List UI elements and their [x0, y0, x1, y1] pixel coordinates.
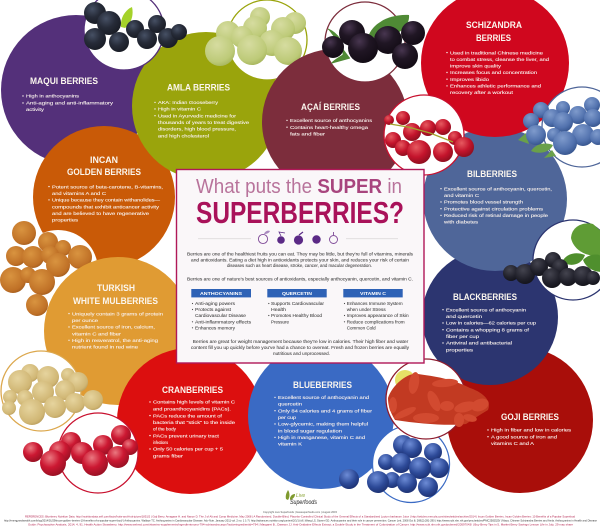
text block: blueberry benefits — [274, 395, 372, 448]
text block: amla benefits: disorders, high blood pressure, — [158, 127, 236, 133]
icon: cranberries photo — [23, 413, 138, 493]
text block: intro: diseases such as heart disease, stroke, cancer, and macular degeneration. — [227, 263, 372, 268]
text block: cranberry benefits: of the body — [153, 427, 177, 433]
column: quercetin: QUERCETIN — [282, 291, 313, 296]
text block: incan benefits — [48, 184, 163, 224]
column: vitamin c: Improves appearance of Skin — [347, 313, 409, 318]
panel: goji berries — [447, 347, 593, 493]
text block: bilberry benefits — [440, 186, 552, 226]
icon: incan golden berries photo — [0, 221, 98, 316]
panel: schizandra berries — [421, 0, 569, 137]
text block: schizandra benefits: improve skin quality — [450, 64, 502, 70]
column: anthocyanins: Protects against — [195, 307, 232, 312]
text block: closing: content fill you up quickly before you've had a chance to overeat. Fresh and frozen berries are equally — [191, 345, 410, 350]
heading: turkish white mulberries — [73, 283, 158, 306]
icon: white mulberries photo — [1, 351, 103, 431]
heading: incan golden berries: INCAN — [90, 155, 118, 165]
text block: copyright and sources: http://energyandwealth.com/blog/2014/01/29/incan-golden-berries-10-benefits-of-a-popular-super-food/ | Anthocyanins. Wallace TC. Anthocyanins in Cardiovascular Disease. Adv Nutr. January 2011 vol. 2 no. 1 1-7 | http://advances.nutrition.org/content/2/1/1.full | Wang LS, Stoner GD. Anthocyanins and their role in cancer prevention. Cancer Lett. 2008 Oct 8; 269(2):281-290 | http://www.ncbi.nlm.nih.gov/pmc/articles/PMC2582525/ | Maca, Chinese Schizandra Berries and Amla. Anthocyanins in Health and Disease — [4, 520, 598, 522]
column: anthocyanins: Enhances memory — [195, 325, 236, 330]
text block: cranberry benefits: grams fiber — [153, 453, 183, 459]
text block: blueberry benefits: Excellent source of anthocyanin and — [278, 395, 369, 401]
text block: cranberry benefits: and proanthocyanidins (PACs). — [153, 406, 231, 412]
heading: turkish white mulberries: TURKISH — [97, 283, 135, 293]
text block: goji benefits: vitamins C and A — [491, 441, 535, 447]
text block: copyright and sources: REFERENCES: Blueberry Nutrition Data. http://nutritiondata.self.com/facts/fruits-and-fruit-juices/1851/2 | Goji Berry. Amagase H. and Nance D. The J of Alt and Comp Medicine. May 2008 | A Randomized, Double-Blind, Placebo-Controlled Clinical Study of the General Effects of a Standardized Lycium barbarum Juice | http://articles.mercola.com/sites/articles/archive/2014 | Incan Golden Berries, Incan Golden Berries: 10 Benefits of a Popular Superfood — [25, 516, 576, 518]
text block: incan benefits: and are believed to have regenerative — [52, 211, 149, 217]
text block: mulberry benefits — [68, 311, 163, 351]
text block: blackberry benefits: Excellent source of anthocyanin — [446, 307, 526, 313]
text block: schizandra benefits — [446, 50, 549, 96]
text block: blueberry benefits: per cup — [278, 415, 296, 421]
text block: schizandra benefits: Used in traditional Chinese medicine — [450, 50, 543, 56]
text block: cranberry benefits: PACs prevent urinary tract — [153, 433, 220, 439]
text block: cranberry benefits: bacteria that "stick" to the inside — [153, 420, 235, 426]
icon: acai photo — [322, 2, 425, 82]
text block: blackberry benefits: Low in calories—62 calories per cup — [446, 321, 536, 327]
text block: mulberry benefits: per ounce — [72, 318, 98, 324]
text block: cranberry benefits: Contains high levels of vitamin C — [153, 400, 236, 406]
column: anthocyanins: Cardiovascular Disease — [195, 313, 246, 318]
column: vitamin c: VITAMIN C — [360, 291, 387, 296]
heading: acai berries: AÇAÍ BERRIES — [301, 101, 360, 112]
icon: goji berries photo — [386, 359, 491, 439]
text block: incan benefits: properties — [52, 218, 79, 224]
text block: bilberry benefits: and vitamin C — [444, 193, 480, 199]
text block: amla benefits: Used in Ayurvedic medicine for — [158, 113, 236, 119]
text block: maqui benefits — [22, 94, 114, 113]
logo: live superfoods — [286, 490, 318, 506]
text block: intro — [187, 251, 414, 282]
heading: blueberries: BLUEBERRIES — [293, 380, 352, 390]
text block: blackberry benefits: Antiviral and antibacterial — [446, 341, 512, 347]
text block: closing — [191, 339, 410, 356]
heading: blackberries: BLACKBERRIES — [453, 292, 517, 302]
panel: bilberries — [423, 127, 567, 271]
text block: goji benefits — [487, 428, 572, 447]
panel: blueberries — [248, 343, 394, 489]
text block: intro: Berries are one of the healthiest fruits you can eat. They may be little, but they're full of vitamins, minerals — [187, 251, 414, 256]
panel: blackberries — [422, 249, 558, 385]
text block: bilberry benefits: with diabetes — [444, 220, 479, 226]
text block: bilberry benefits: Protective against circulation problems — [444, 206, 544, 212]
text block: schizandra benefits: recovery after a workout — [450, 90, 514, 96]
text block: blackberry benefits: properties — [446, 347, 474, 353]
column: quercetin: Pressure — [271, 319, 289, 324]
text block: amla benefits: AKA: Indian Gooseberry — [158, 100, 219, 106]
text block: mulberry benefits: vitamin C and fiber — [72, 331, 121, 337]
text block: goji benefits: A good source of iron and — [491, 434, 557, 440]
column: quercetin: Supports Cardiovascular — [271, 301, 324, 306]
text block: incan benefits: compounds that exhibit anticancer activity — [52, 204, 160, 210]
text block: acai benefits: Contains heart-healthy omega — [290, 125, 368, 131]
heading: schizandra berries: SCHIZANDRA — [466, 20, 522, 30]
title: SUPERBERRIES? — [196, 196, 404, 230]
icon: amla photo — [205, 0, 307, 80]
text block: incan benefits: and vitamins A and C — [52, 191, 107, 197]
text block: copyright and sources: Guide: Psychoactive Analysis, 2014, 4, 91. Health Action Strawberry. http://www.webmd.com/vitamins-supplements/ingredientmono-794-schisandra.aspx?activeingredientid=794 | Margaret B., Dawson JJ. Anti-Oxidative Effects Extract; a Double-Study in the Treatment of Colonization of Cancer. http://www.ncbi.nlm.nih.gov/pubmed/20597043/ | Buy Berry Tips in 5, Market Berry Savings Lesson Life in July, 29 may share — [28, 524, 574, 526]
text block: copyright and sources — [4, 510, 598, 526]
column: anthocyanins — [191, 289, 252, 330]
text block: closing: Berries are great for weight management because they're low in calories. Their high fiber and water — [193, 339, 409, 344]
column: quercetin: Health — [271, 307, 286, 312]
column: vitamin c: Enhances Immune System — [347, 301, 403, 306]
heading: bilberries: BILBERRIES — [467, 169, 517, 179]
heading: maqui berries: MAQUI BERRIES — [30, 76, 98, 86]
column: vitamin c: when under Stress — [347, 307, 386, 312]
panel: turkish white mulberries — [44, 257, 192, 405]
title — [196, 176, 404, 230]
column: quercetin — [267, 289, 327, 324]
panel: incan golden berries — [33, 126, 175, 268]
text block: maqui benefits: High in anthocyanins — [26, 94, 80, 100]
text block: bilberry benefits: Excellent source of anthocyanin, quercetin, — [444, 186, 552, 192]
text block: mulberry benefits: Excellent source of iron, calcium, — [72, 325, 155, 331]
text block: blueberry benefits: quercetin — [278, 402, 302, 408]
text block: cranberry benefits — [149, 400, 236, 459]
text block: mulberry benefits: High in resveratrol, the anti-aging — [72, 338, 158, 344]
panel: amla berries — [132, 32, 280, 180]
text block: intro: and antioxidants. Eating a diet high in antioxidants protects your skin, and reduces your risk of certain — [191, 257, 409, 262]
text block: cranberry benefits: infections — [153, 440, 168, 446]
text block: schizandra benefits: Enhances athletic performance and — [450, 84, 541, 90]
text block: blackberry benefits: and quercetin — [446, 314, 482, 320]
heading: amla berries: AMLA BERRIES — [167, 82, 230, 92]
text block: blueberry benefits: High in manganese, vitamin C and — [278, 435, 365, 441]
panel: cranberries — [117, 348, 263, 494]
text block: mulberry benefits: nutrient found in red wine — [72, 345, 138, 351]
icon: blueberries photo — [339, 426, 450, 502]
heading: schizandra berries — [466, 20, 522, 43]
text block: maqui benefits: Anti-aging and anti-inflammatory — [26, 101, 114, 107]
column: quercetin: Promotes Healthy Blood — [271, 313, 322, 318]
text block: cranberry benefits: Only 50 calories per cup + 5 — [153, 447, 223, 453]
text block: intro: Berries are one of nature's best sources of antioxidants, especially anthocyanin, quercetin, and vitamin C. — [187, 276, 413, 282]
icon: red currants photo — [384, 95, 474, 175]
column: vitamin c — [343, 289, 409, 330]
text block: acai benefits: Excellent source of anthocyanins — [290, 118, 373, 124]
text block: blackberry benefits: Contains a whopping 8 grams of — [446, 327, 530, 333]
text block: blueberry benefits: Low-glycemic, making them helpful — [278, 422, 368, 428]
column: anthocyanins: ANTHOCYANINS — [200, 291, 242, 296]
text block: bilberry benefits: Reduced risk of retinal damage in people — [444, 213, 548, 219]
logo: live superfoods: Superfoods — [290, 499, 318, 506]
text block: acai benefits — [286, 118, 373, 138]
text block: goji benefits: High in fiber and low in calories — [491, 428, 572, 434]
column: anthocyanins: Anti-inflammatory effects — [195, 319, 252, 324]
text block: amla benefits: and high cholesterol — [158, 133, 209, 139]
text block: amla benefits — [154, 100, 249, 139]
heading: goji berries: GOJI BERRIES — [501, 412, 559, 422]
text block: acai benefits: fats and fiber — [290, 132, 325, 138]
heading: incan golden berries — [67, 155, 141, 177]
title: What puts the SUPER in — [196, 176, 402, 198]
panel: acai berries — [262, 49, 408, 195]
column: vitamin c: Common Cold — [347, 325, 376, 330]
text block: bilberry benefits: Promotes blood vessel strength — [444, 200, 523, 206]
panel: what puts the super in superberries — [176, 170, 424, 363]
text block: incan benefits: Unique because they contain withanolides— — [52, 198, 160, 204]
text block: copyright and sources: Copyright Live Superfoods | liveasuperfoods.com | August 2015 — [263, 510, 338, 514]
text block: blackberry benefits: fiber per cup — [446, 334, 479, 340]
text block: blackberry benefits — [442, 307, 536, 353]
column: vitamin c: Reduce complications from — [347, 319, 405, 324]
text block: cranberry benefits: PACs reduce the amount of — [153, 413, 223, 419]
text block: blueberry benefits: Only 84 calories and 4 grams of fiber — [278, 408, 372, 414]
column: anthocyanins: Anti-aging powers — [195, 301, 236, 306]
text block: blueberry benefits: vitamin K — [278, 442, 303, 448]
text block: amla benefits: thousands of years to treat digestive — [158, 120, 249, 126]
text block: amla benefits: High in vitamin C — [158, 107, 202, 113]
icon: maqui berries photo — [84, 0, 187, 70]
text block: blueberry benefits: in blood sugar regulation — [278, 428, 342, 434]
heading: incan golden berries: GOLDEN BERRIES — [67, 167, 141, 177]
text block: incan benefits: Potent source of beta-carotene, B-vitamins, — [52, 184, 163, 190]
text block: mulberry benefits: Uniquely contain 3 grams of protein — [72, 311, 163, 317]
panel: maqui berries — [1, 15, 151, 165]
logo: live superfoods: Live — [296, 493, 305, 499]
text block: schizandra benefits: Improves libido — [450, 77, 489, 83]
heading: turkish white mulberries: WHITE MULBERRIES — [73, 296, 158, 306]
text block: maqui benefits: activity — [26, 107, 45, 113]
icon: bilberries photo — [518, 87, 600, 167]
text block: closing: nutritious and unprocessed. — [273, 351, 330, 356]
heading: cranberries: CRANBERRIES — [162, 385, 223, 395]
text block: schizandra benefits: to combat stress, cleanse the liver, and — [450, 57, 549, 63]
icon row: fruit icons — [198, 231, 398, 245]
heading: schizandra berries: BERRIES — [476, 33, 511, 43]
icon: blackberries photo — [503, 220, 600, 300]
text block: schizandra benefits: Increases focus and concentration — [450, 70, 537, 76]
